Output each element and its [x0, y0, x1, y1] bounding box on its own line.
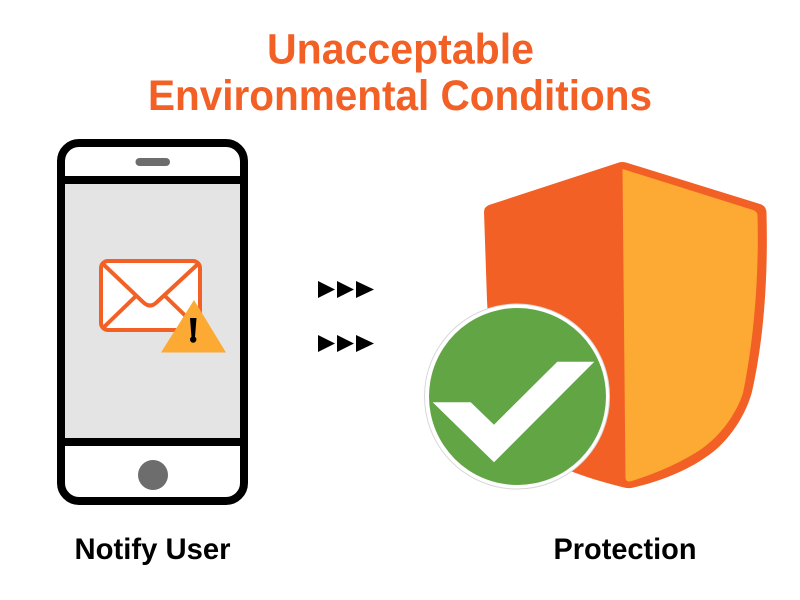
arrows: lower row	[318, 335, 374, 352]
label: protection: Protection	[554, 533, 696, 566]
title: Environmental Conditions	[148, 72, 652, 120]
icon: smartphone	[61, 143, 244, 501]
icon: email envelope	[101, 261, 200, 330]
icon: green check badge	[424, 304, 610, 489]
icon: shield	[484, 162, 767, 488]
arrows: upper row	[318, 281, 374, 298]
icon: warning triangle	[161, 300, 226, 352]
title	[148, 26, 652, 120]
label: notify user: Notify User	[74, 533, 231, 566]
title: Unacceptable	[267, 26, 534, 74]
